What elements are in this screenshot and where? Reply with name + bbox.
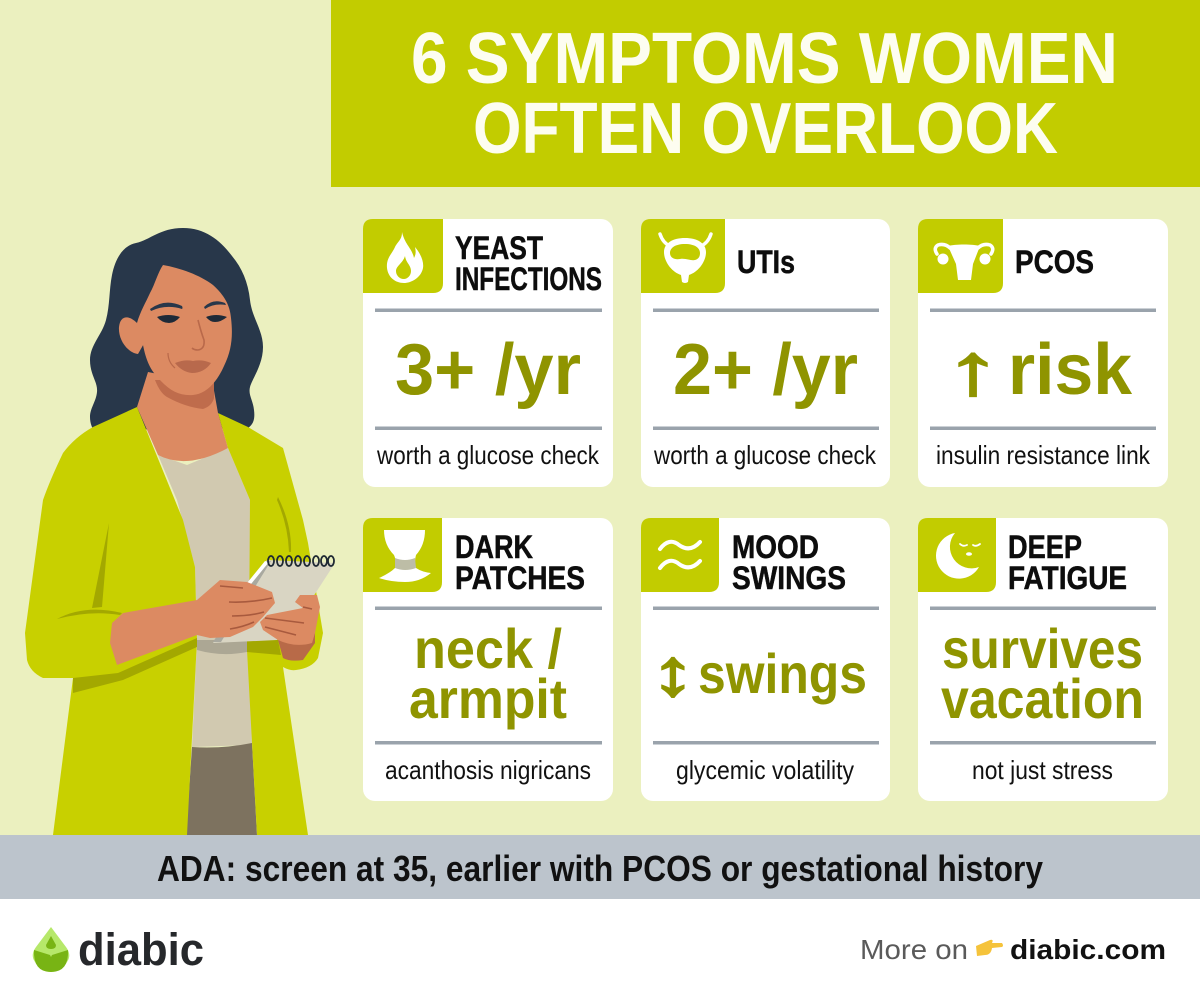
heading: DEEP [1008,529,1082,565]
caption: not just stress [972,755,1113,785]
value: 2+ /yr [673,330,858,410]
icon: bladder [641,219,725,293]
panel: mood swings [641,518,890,801]
heading [455,230,602,297]
icon: uterus [918,219,1003,293]
footer link: diabic.com [1010,934,1166,965]
footer link [860,934,1166,965]
icon: flame [363,219,443,293]
value: neck / [414,617,562,680]
icon: green drop [33,927,69,972]
heading: INFECTIONS [455,261,602,297]
heading: PCOS [1015,244,1094,280]
heading: YEAST [455,230,543,266]
icon: waves [641,518,719,592]
callout: ADA screening bar: ADA: screen at 35, earlier with PCOS or gestational history [157,848,1043,889]
caption: acanthosis nigricans [385,755,591,785]
value: risk [1008,330,1133,410]
value: ↕ [651,635,695,709]
heading: MOOD [732,529,819,565]
value: survives [942,617,1143,680]
title banner: 6 SYMPTOMS WOMEN [411,19,1118,99]
heading [455,529,585,596]
heading: FATIGUE [1008,560,1127,596]
illustration: woman with notepad [25,228,335,835]
heading [1008,529,1127,596]
heading: UTIs [737,244,795,280]
panel: deep fatigue [918,518,1168,801]
icon: pointing hand [976,940,1003,956]
caption: insulin resistance link [936,440,1151,470]
caption: worth a glucose check [653,440,877,470]
caption: worth a glucose check [376,440,600,470]
value [651,635,867,709]
panel: UTIs [641,219,890,487]
heading: SWINGS [732,560,846,596]
icon: neck [363,518,442,592]
logo: diabic: diabic [78,924,204,975]
footer link: More on [860,934,968,965]
value: armpit [409,667,567,730]
title banner [331,0,1200,187]
heading: DARK [455,529,533,565]
heading [732,529,846,596]
panel: PCOS [918,219,1168,487]
value [945,330,1133,410]
panel: yeast infections [363,219,613,487]
callout: ADA screening bar [0,835,1200,899]
value: swings [698,642,867,705]
value [941,617,1144,730]
value: 3+ /yr [395,330,581,410]
value [409,617,567,730]
icon: sleeping moon [918,518,996,592]
title banner: OFTEN OVERLOOK [473,89,1058,169]
heading: PATCHES [455,560,585,596]
value: vacation [941,667,1144,730]
caption: glycemic volatility [676,755,854,785]
value: ↑ [945,330,1001,410]
panel: dark patches [363,518,613,801]
